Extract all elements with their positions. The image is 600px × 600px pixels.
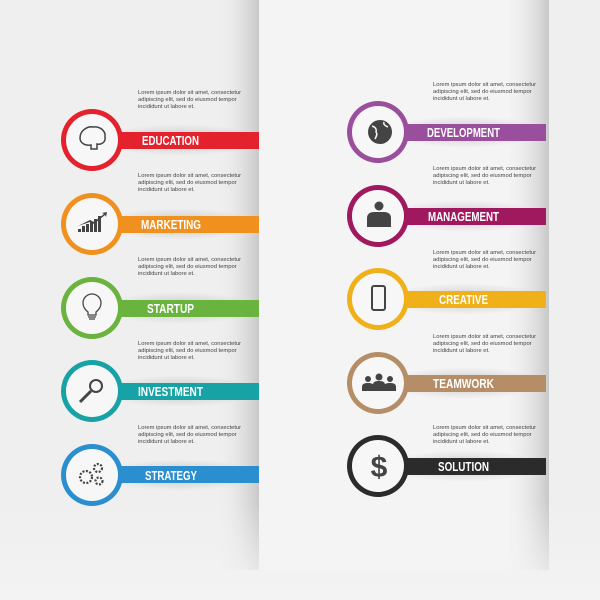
item: startup: adipiscing elit, sed do eiusmod tempor xyxy=(138,264,237,270)
icon: chart xyxy=(78,212,107,232)
icon: gears xyxy=(80,464,102,484)
item: teamwork: adipiscing elit, sed do eiusmod tempor xyxy=(433,341,532,347)
item: strategy: incididunt ut labore et. xyxy=(138,439,195,445)
item: solution: adipiscing elit, sed do eiusmod tempor xyxy=(433,432,532,438)
item: education xyxy=(61,90,260,171)
item: development: adipiscing elit, sed do eiusmod tempor xyxy=(433,89,532,95)
icon: dollar: $ xyxy=(371,451,388,484)
item: education: EDUCATION xyxy=(142,133,199,148)
item: creative: adipiscing elit, sed do eiusmod tempor xyxy=(433,257,532,263)
item: education: adipiscing elit, sed do eiusmod tempor xyxy=(138,97,237,103)
item: marketing: Lorem ipsum dolor sit amet, consectetur xyxy=(138,173,241,179)
item: education: Lorem ipsum dolor sit amet, consectetur xyxy=(138,90,241,96)
icon: globe xyxy=(368,120,392,144)
item: investment: incididunt ut labore et. xyxy=(138,355,195,361)
item: strategy: STRATEGY xyxy=(145,468,197,483)
icon: phone xyxy=(372,286,385,310)
item: creative: CREATIVE xyxy=(439,292,488,307)
item: education: incididunt ut labore et. xyxy=(138,104,195,110)
icon: team xyxy=(362,374,396,391)
item: marketing: adipiscing elit, sed do eiusmod tempor xyxy=(138,180,237,186)
item: development: Lorem ipsum dolor sit amet, consectetur xyxy=(433,82,536,88)
item: solution: SOLUTION xyxy=(438,459,489,474)
icon: brain xyxy=(80,127,105,149)
item: management: adipiscing elit, sed do eiusmod tempor xyxy=(433,173,532,179)
item: development: incididunt ut labore et. xyxy=(433,96,490,102)
icon: magnifier xyxy=(80,380,102,402)
item: strategy: adipiscing elit, sed do eiusmod tempor xyxy=(138,432,237,438)
icon: person xyxy=(367,202,391,227)
icon: bulb xyxy=(83,294,101,319)
item: investment xyxy=(61,341,260,422)
item: solution xyxy=(347,425,546,497)
item: development xyxy=(347,82,546,163)
item: creative: incididunt ut labore et. xyxy=(433,264,490,270)
item: creative: Lorem ipsum dolor sit amet, consectetur xyxy=(433,250,536,256)
item: management: Lorem ipsum dolor sit amet, consectetur xyxy=(433,166,536,172)
item: strategy xyxy=(61,425,260,506)
item: startup xyxy=(61,257,260,339)
item: solution: incididunt ut labore et. xyxy=(433,439,490,445)
item: investment: INVESTMENT xyxy=(138,384,203,399)
item: creative xyxy=(347,250,546,330)
item: startup: Lorem ipsum dolor sit amet, consectetur xyxy=(138,257,241,263)
item: investment: adipiscing elit, sed do eiusmod tempor xyxy=(138,348,237,354)
item: marketing: incididunt ut labore et. xyxy=(138,187,195,193)
item: development: DEVELOPMENT xyxy=(427,125,500,140)
item: marketing: MARKETING xyxy=(141,217,201,232)
item: management: incididunt ut labore et. xyxy=(433,180,490,186)
item: teamwork: TEAMWORK xyxy=(433,376,494,391)
item: management: MANAGEMENT xyxy=(428,209,499,224)
item: teamwork: incididunt ut labore et. xyxy=(433,348,490,354)
item: startup: STARTUP xyxy=(147,301,194,316)
item: strategy: Lorem ipsum dolor sit amet, consectetur xyxy=(138,425,241,431)
item: marketing xyxy=(61,173,260,255)
item: teamwork: Lorem ipsum dolor sit amet, consectetur xyxy=(433,334,536,340)
item: investment: Lorem ipsum dolor sit amet, consectetur xyxy=(138,341,241,347)
item: management xyxy=(347,166,546,247)
item: teamwork xyxy=(347,334,546,414)
item: startup: incididunt ut labore et. xyxy=(138,271,195,277)
item: solution: Lorem ipsum dolor sit amet, consectetur xyxy=(433,425,536,431)
